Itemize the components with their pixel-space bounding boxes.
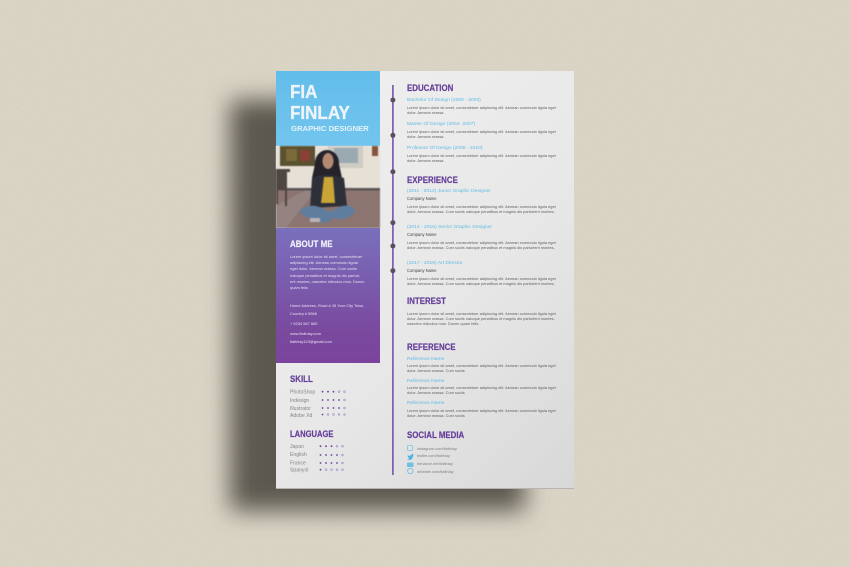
education text 2: dolor. Aenean massa — [407, 134, 443, 139]
experience text 2: dolor. Aenean massa. Cum sociis natoque penatibus et magnis dis parturient montes, — [407, 244, 555, 250]
interest text: dolor. Aenean massa. Cum sociis natoque penatibus et magnis dis parturient montes, — [407, 316, 555, 321]
photo: woman seated on floor — [275, 145, 381, 228]
heading: language: LANGUAGE — [290, 429, 334, 440]
experience text 2: Lorem ipsum dolor sit amet, consectetuer adipiscing elit. Aenean commodo ligula eget — [407, 240, 556, 244]
education text 3 — [407, 153, 556, 163]
experience text 2 — [407, 240, 556, 250]
reference name 2: Reference Name — [407, 378, 444, 384]
section: experience: EXPERIENCE — [407, 174, 458, 186]
about text: Lorem ipsum dolor sit amet, consectetuer — [290, 254, 362, 259]
about text: ent montes, nascetur ridiculus mus. Donec — [290, 279, 364, 284]
timeline — [390, 85, 396, 475]
reference text 1: dolor. Aenean massa. Cum sociis — [407, 368, 465, 373]
company 1: Company Name — [407, 196, 437, 201]
reference text 2: Lorem ipsum dolor sit amet, consectetuer adipiscing elit. Aenean commodo ligula eget — [407, 385, 556, 390]
company 2: Company Name — [407, 232, 437, 237]
section: interest: INTEREST — [407, 296, 446, 307]
instagram link: instagram.com/fiafinlay — [417, 446, 457, 450]
reference name 3: Reference Name — [407, 401, 444, 406]
reference text 1: Lorem ipsum dolor sit amet, consectetuer adipiscing elit. Aenean commodo ligula eget — [407, 363, 556, 368]
interest text: nascetur ridiculus mus. Donec quam felis. — [407, 321, 479, 326]
resume sheet — [276, 71, 574, 489]
experience text 3: dolor. Aenean massa. Cum sociis natoque penatibus et magnis dis parturient montes, — [407, 280, 555, 286]
panel: about me and contact — [276, 228, 380, 363]
skill ratings — [290, 390, 346, 419]
language ratings: English — [290, 452, 307, 458]
header panel: name and title — [276, 71, 380, 146]
heading: about me: ABOUT ME — [290, 239, 333, 250]
contact details: Home Address, Road # 45 Your City Town, — [290, 303, 364, 308]
about text: eget dolor. Aenean massa. Cum sociis — [290, 266, 357, 271]
interest text — [407, 311, 556, 326]
experience text 1 — [407, 204, 556, 214]
skill ratings: Adobe Xd — [290, 413, 313, 419]
skill ratings: Indesign — [290, 398, 309, 404]
experience text 3: Lorem ipsum dolor sit amet, consectetuer adipiscing elit. Aenean commodo ligula eget — [407, 276, 556, 280]
contact details: + 5234 567 889 — [290, 321, 317, 326]
about text: quam felis — [290, 285, 308, 290]
experience entry 2: (2014 - 2016) Senior Graphic Designer — [407, 224, 492, 230]
reference text 1 — [407, 363, 556, 373]
heading: skill: SKILL — [290, 374, 313, 385]
behance link: behance.net/fiafinlay — [417, 460, 453, 466]
reference text 3: Lorem ipsum dolor sit amet, consectetuer adipiscing elit. Aenean commodo ligula eget — [407, 408, 556, 412]
skill ratings: Illustrator — [290, 406, 311, 412]
section: reference: REFERENCE — [407, 342, 456, 353]
education text 2: Lorem ipsum dolor sit amet, consectetuer adipiscing elit. Aenean commodo ligula eget — [407, 129, 556, 134]
section: social media: SOCIAL MEDIA — [407, 430, 464, 441]
social icons — [407, 445, 414, 474]
interest text: Lorem ipsum dolor sit amet, consectetuer adipiscing elit. Aenean commodo ligula eget — [407, 311, 556, 316]
contact details: www.fiafinlay.com — [290, 330, 321, 336]
experience entry 3: (2017 - 2019) Art Director — [407, 260, 463, 266]
experience text 1: dolor. Aenean massa. Cum sociis natoque penatibus et magnis dis parturient montes, — [407, 208, 555, 214]
education text 1: Lorem ipsum dolor sit amet, consectetuer adipiscing elit. Aenean commodo ligula eget — [407, 105, 556, 110]
language ratings: Spanyol — [290, 468, 308, 474]
language ratings — [290, 444, 344, 474]
language ratings: France — [290, 460, 306, 466]
company 3: Company Name — [407, 268, 437, 273]
education entry 3: Professor Of Design (2008 - 2010) — [407, 146, 482, 150]
name: FINLAY — [290, 102, 350, 123]
experience entry 1: (2011 - 2013) Junior Graphic Designer — [407, 189, 491, 194]
about text: natoque penatibus et magnis dis parturi- — [290, 273, 360, 278]
language ratings: Japan — [290, 444, 304, 450]
about text: adipiscing elit. Aenean commodo ligula — [290, 260, 358, 265]
education entry 2: Master Of Design (2004- 2007) — [407, 122, 475, 126]
education text 2 — [407, 129, 556, 139]
dribbble link: dribbble.com/fiafinlay — [417, 468, 454, 474]
education text 1 — [407, 105, 556, 115]
education text 3: Lorem ipsum dolor sit amet, consectetuer adipiscing elit. Aenean commodo ligula eget — [407, 153, 556, 158]
contact details — [290, 303, 364, 344]
education entry 1: Bachelor Of Design (2000 - 2003) — [407, 98, 481, 103]
contact details: Country # 5566 — [290, 310, 317, 316]
name: FIA — [290, 81, 317, 102]
reference text 2: dolor. Aenean massa. Cum sociis — [407, 390, 465, 395]
reference name 1: Reference Name — [407, 356, 444, 362]
reference text 3 — [407, 408, 556, 418]
twitter link: twitter.com/fiafinlay — [417, 453, 450, 458]
job title: GRAPHIC DESIGNER — [291, 124, 369, 133]
name — [290, 81, 350, 123]
education text 1: dolor. Aenean massa — [407, 110, 443, 115]
reference text 3: dolor. Aenean massa. Cum sociis — [407, 412, 465, 418]
contact details: fiafinlay123@gmail.com — [290, 338, 332, 344]
experience text 1: Lorem ipsum dolor sit amet, consectetuer adipiscing elit. Aenean commodo ligula eget — [407, 204, 556, 208]
about text — [290, 254, 364, 290]
reference text 2 — [407, 385, 556, 395]
skill ratings: PhotoShop — [290, 390, 315, 396]
education text 3: dolor. Aenean massa — [407, 158, 443, 163]
section: education: EDUCATION — [407, 83, 453, 94]
experience text 3 — [407, 276, 556, 286]
